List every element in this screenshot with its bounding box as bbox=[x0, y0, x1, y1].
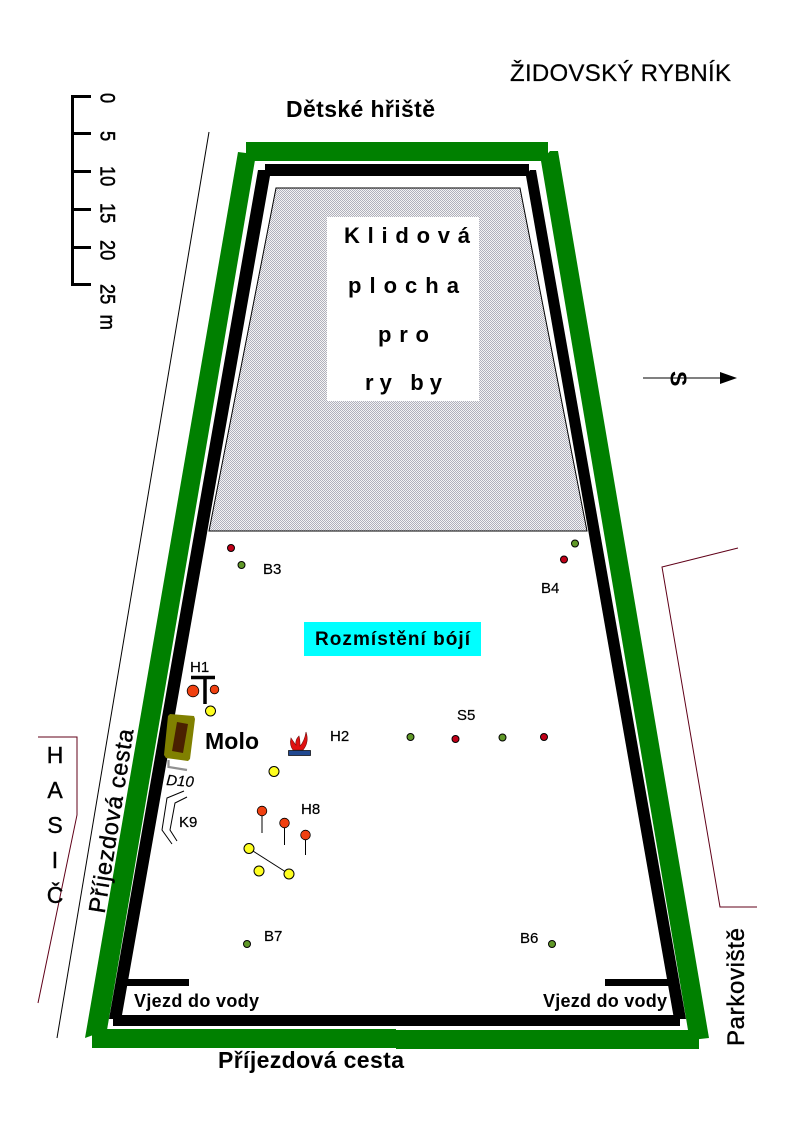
scale labels bbox=[95, 93, 119, 330]
buoy B6: B6 bbox=[520, 930, 538, 947]
buoys B3 bbox=[228, 544, 281, 578]
Parkoviště label: Parkoviště bbox=[723, 928, 750, 1046]
quiet zone for fish bbox=[209, 188, 587, 531]
quiet zone label: ry by bbox=[365, 370, 443, 395]
yellow buoy bbox=[269, 766, 279, 776]
scale bar bbox=[72, 93, 119, 330]
water entry label left: Vjezd do vody bbox=[134, 991, 259, 1011]
water entry label right: Vjezd do vody bbox=[543, 991, 667, 1011]
buoy B7: B7 bbox=[264, 928, 282, 945]
buoy group S5 bbox=[407, 707, 548, 742]
buoy placement heading bbox=[304, 622, 481, 656]
scale labels: 25 m bbox=[95, 284, 119, 330]
quiet zone label: pro bbox=[378, 322, 429, 347]
Hasiči label: I bbox=[52, 847, 58, 873]
icon: flame buoy bbox=[288, 732, 310, 756]
left road line bbox=[57, 132, 209, 1038]
buoy B6 bbox=[520, 930, 556, 948]
title: ŽIDOVSKÝ RYBNÍK bbox=[510, 60, 731, 87]
yellow buoy group bbox=[244, 844, 294, 879]
north/south arrow: S bbox=[666, 371, 692, 386]
north/south arrow bbox=[643, 371, 737, 386]
K9 chicane bbox=[162, 791, 187, 844]
D10 label: D10 bbox=[166, 772, 195, 791]
buoy group H1 bbox=[187, 659, 219, 716]
Hasiči label bbox=[47, 742, 63, 908]
scale labels: 20 bbox=[95, 240, 119, 260]
Hasiči label: A bbox=[47, 777, 63, 803]
access road label, bottom: Příjezdová cesta bbox=[218, 1047, 404, 1073]
Hasiči label: S bbox=[47, 812, 63, 838]
buoys B3: B3 bbox=[263, 561, 281, 578]
buoy group H8 bbox=[257, 801, 320, 855]
label: playground: Dětské hřiště bbox=[286, 96, 435, 122]
buoys B4: B4 bbox=[541, 580, 559, 597]
scale labels: 15 bbox=[95, 203, 119, 223]
Hasiči label: Č bbox=[47, 881, 63, 908]
buoy group H1: H1 bbox=[190, 659, 209, 676]
buoy group S5: S5 bbox=[457, 707, 475, 724]
buoys B4 bbox=[541, 540, 578, 597]
jetty label: Molo bbox=[205, 728, 259, 754]
scale labels: 0 bbox=[95, 93, 119, 103]
H2 label: H2 bbox=[330, 728, 349, 745]
quiet zone label: plocha bbox=[348, 273, 460, 298]
jetty bbox=[164, 714, 195, 770]
black border: pond edge bbox=[109, 164, 686, 1026]
scale labels: 5 bbox=[95, 131, 119, 141]
access road label, left: Příjezdová cesta bbox=[84, 726, 139, 915]
K9 label: K9 bbox=[179, 814, 197, 831]
quiet zone label bbox=[327, 217, 479, 401]
buoy B7 bbox=[244, 928, 282, 948]
scale labels: 10 bbox=[95, 166, 119, 186]
Hasiči outline bbox=[38, 737, 77, 1003]
buoy group H8: H8 bbox=[301, 801, 320, 818]
Parkoviště outline bbox=[662, 548, 757, 907]
buoy placement heading: Rozmístění bójí bbox=[315, 629, 471, 650]
Hasiči label: H bbox=[47, 742, 63, 768]
green border: pond bank bbox=[85, 142, 709, 1049]
quiet zone label: Klidová bbox=[344, 223, 471, 248]
